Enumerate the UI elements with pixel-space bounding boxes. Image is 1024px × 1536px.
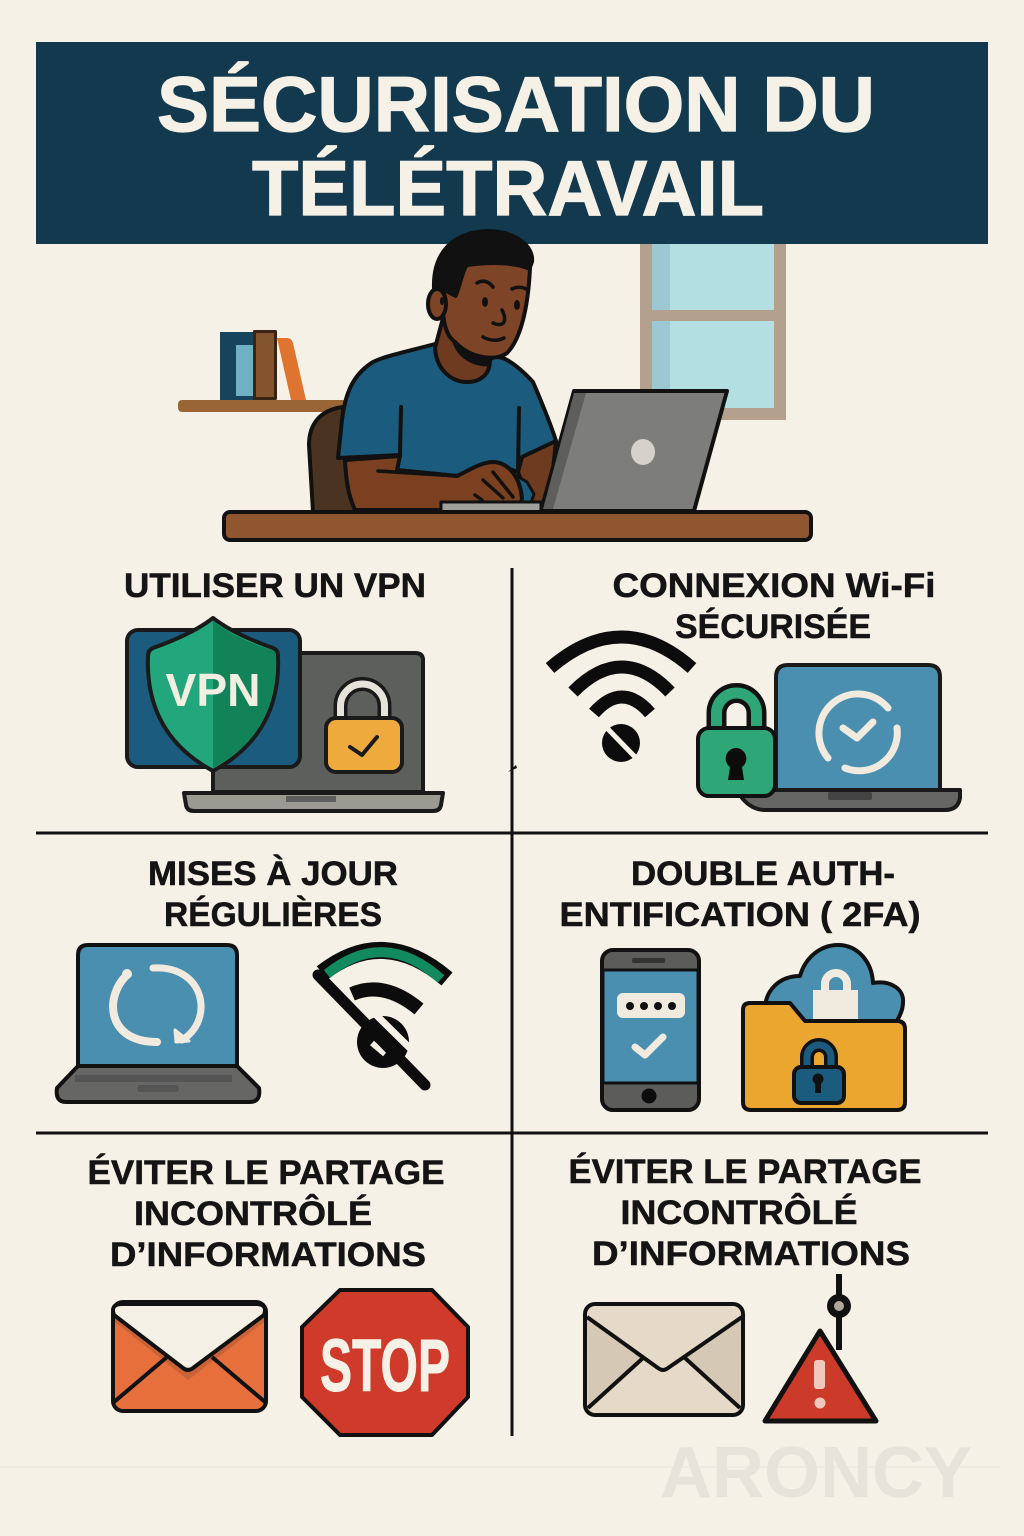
heading: 2FA <box>560 855 920 934</box>
icon: stop sign: STOP <box>320 1324 450 1407</box>
icon: VPN shield: VPN <box>166 664 260 716</box>
panel: VPN <box>124 567 443 811</box>
heading: Wi-Fi <box>612 567 936 646</box>
icon: yellow folder <box>743 1003 905 1110</box>
face features <box>477 281 528 340</box>
panel: sharing <box>88 1154 468 1435</box>
grid dividers <box>36 568 988 1436</box>
heading: 2FA: DOUBLE AUTH- <box>631 855 895 893</box>
window <box>640 244 786 420</box>
heading: phishing: D’INFORMATIONS <box>592 1235 910 1273</box>
heading: updates <box>148 855 398 934</box>
neck <box>435 318 500 382</box>
heading: sharing: ÉVITER LE PARTAGE <box>88 1154 444 1192</box>
ear <box>428 289 446 319</box>
torso <box>338 344 556 495</box>
sleeve creases <box>400 407 519 472</box>
icon: stop sign <box>302 1290 468 1435</box>
icon: hook and warning triangle <box>765 1274 876 1421</box>
icon: laptop with padlock <box>184 653 443 811</box>
heading: Wi-Fi: CONNEXION Wi-Fi <box>612 567 936 605</box>
chair <box>309 407 355 512</box>
icon: orange envelope <box>113 1302 266 1411</box>
heading: 2FA: ENTIFICATION ( 2FA) <box>560 896 920 934</box>
hair <box>433 230 533 297</box>
panel: updates <box>57 855 447 1102</box>
icon: cloud padlock <box>765 945 903 1025</box>
arm and hand <box>345 456 522 510</box>
panel: phishing <box>568 1153 922 1421</box>
forearm <box>518 441 556 506</box>
heading: phishing: INCONTRÔLÉ <box>620 1193 858 1232</box>
icon: laptop with refresh <box>57 945 259 1102</box>
heading: phishing <box>568 1153 922 1273</box>
laptop <box>541 391 727 511</box>
panel: 2FA <box>560 855 920 1110</box>
jaw shadow <box>452 338 490 366</box>
icon: VPN shield <box>148 618 278 771</box>
wrist patch <box>517 476 534 506</box>
heading: updates: MISES À JOUR <box>148 855 398 893</box>
heading: phishing: ÉVITER LE PARTAGE <box>568 1153 922 1191</box>
watermark: ARONCY <box>660 1433 972 1513</box>
mark on divider <box>508 765 517 772</box>
heading: sharing <box>88 1154 444 1274</box>
desk <box>224 512 811 540</box>
heading: updates: RÉGULIÈRES <box>164 896 382 934</box>
heading: sharing: INCONTRÔLÉ <box>134 1194 372 1233</box>
icon: phone <box>602 950 699 1110</box>
panel: Wi-Fi <box>508 567 960 810</box>
icon: Wi-Fi <box>550 637 692 762</box>
icon: blue screen <box>127 630 300 767</box>
icon: beige envelope <box>585 1304 743 1415</box>
keyboard <box>441 502 541 512</box>
illustration: person working at laptop <box>178 230 811 540</box>
icon: Wi-Fi crossed out <box>318 950 447 1085</box>
title banner: SÉCURISATION DU <box>157 60 875 148</box>
icon: laptop with check <box>742 665 960 810</box>
heading: VPN: UTILISER UN VPN <box>124 567 426 605</box>
heading: Wi-Fi: SÉCURISÉE <box>675 608 871 646</box>
icon: green padlock <box>698 693 775 796</box>
title banner: TÉLÉTRAVAIL <box>252 144 764 232</box>
heading: sharing: D’INFORMATIONS <box>110 1236 426 1274</box>
head <box>443 263 530 358</box>
title banner <box>36 42 988 244</box>
shelf with books <box>178 332 348 412</box>
